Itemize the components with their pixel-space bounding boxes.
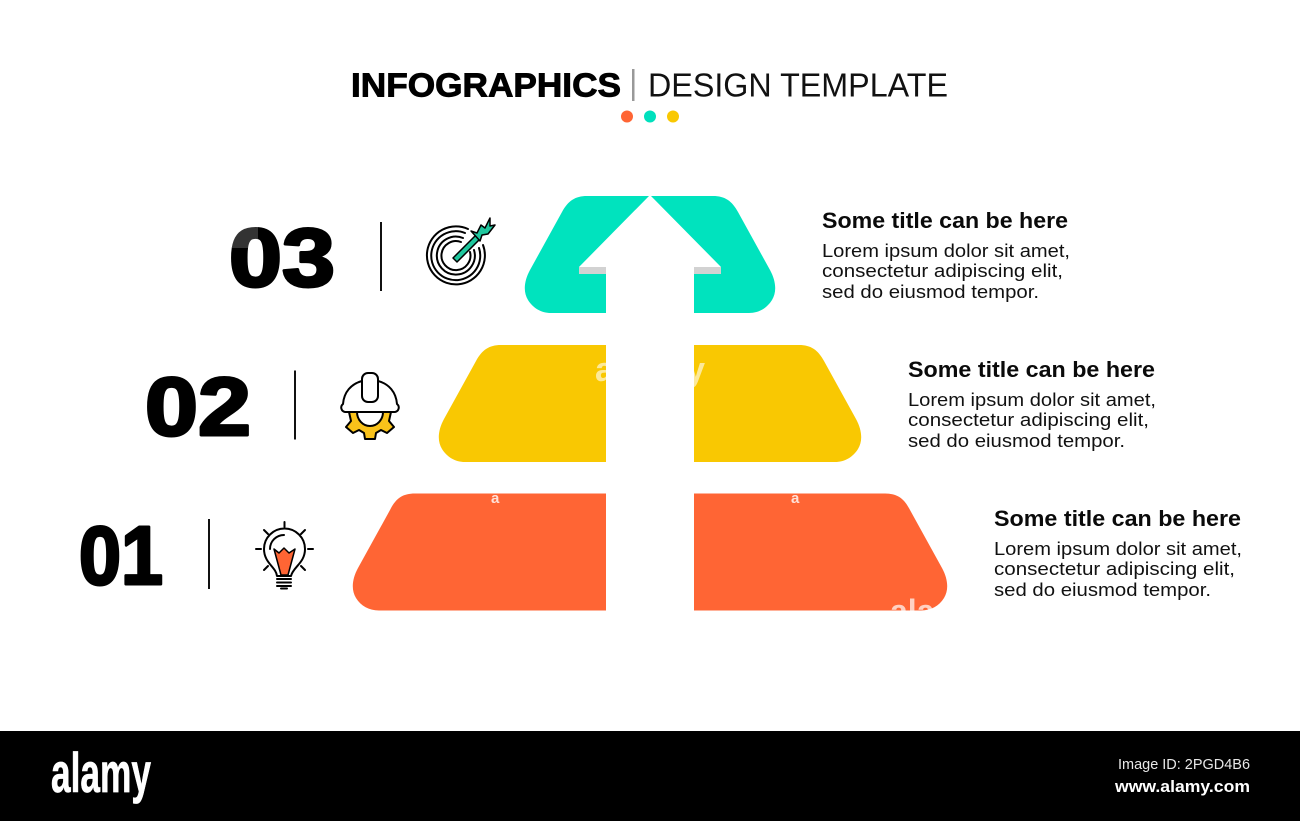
row 1: text block: sed do eiusmod tempor. xyxy=(994,579,1211,600)
row 1: text block xyxy=(994,506,1242,600)
title xyxy=(351,66,948,104)
row 1: text block: consectetur adipiscing elit, xyxy=(994,558,1235,579)
watermark traces: a y xyxy=(595,351,705,389)
title: INFOGRAPHICS xyxy=(351,66,621,104)
row 2: text block xyxy=(908,357,1156,451)
row 3: text block: consectetur adipiscing elit, xyxy=(822,260,1063,281)
footer logo: alamy xyxy=(51,741,151,804)
pyramid tier 2: yellow xyxy=(439,345,861,462)
row 1: text block: Lorem ipsum dolor sit amet, xyxy=(994,538,1242,559)
title dots xyxy=(621,110,679,122)
row 3: number: 03 xyxy=(229,211,335,304)
row 1: number: 01 xyxy=(79,509,163,602)
watermark traces: a xyxy=(491,490,500,507)
row 3: text block: sed do eiusmod tempor. xyxy=(822,281,1039,302)
icon: target with arrow xyxy=(427,218,495,284)
title: DESIGN TEMPLATE xyxy=(648,66,948,104)
footer image id: Image ID: 2PGD4B6 xyxy=(1118,756,1250,773)
watermark traces: a xyxy=(791,490,800,507)
row 2: text block: consectetur adipiscing elit, xyxy=(908,409,1149,430)
row 2: number: 02 xyxy=(145,360,251,453)
row 2: text block: Some title can be here xyxy=(908,357,1155,382)
row 3: text block: Lorem ipsum dolor sit amet, xyxy=(822,240,1070,261)
row 1: text block: Some title can be here xyxy=(994,506,1241,531)
icon: hard hat with gear xyxy=(341,373,399,439)
footer band xyxy=(0,731,1300,821)
row 2: text block: Lorem ipsum dolor sit amet, xyxy=(908,389,1156,410)
pyramid tier 1: orange xyxy=(353,494,947,610)
watermark traces xyxy=(491,351,935,629)
row 3: text block: Some title can be here xyxy=(822,208,1068,233)
watermark traces: ala xyxy=(890,593,935,629)
row 3: text block xyxy=(822,208,1070,302)
row 2: text block: sed do eiusmod tempor. xyxy=(908,430,1125,451)
footer url: www.alamy.com xyxy=(1114,777,1250,796)
row 3: divider xyxy=(380,222,382,291)
pyramid tier 3: teal arrowhead xyxy=(525,196,775,313)
row 2: divider xyxy=(294,370,296,440)
row 1: divider xyxy=(208,519,210,589)
icon: light bulb xyxy=(256,522,313,588)
